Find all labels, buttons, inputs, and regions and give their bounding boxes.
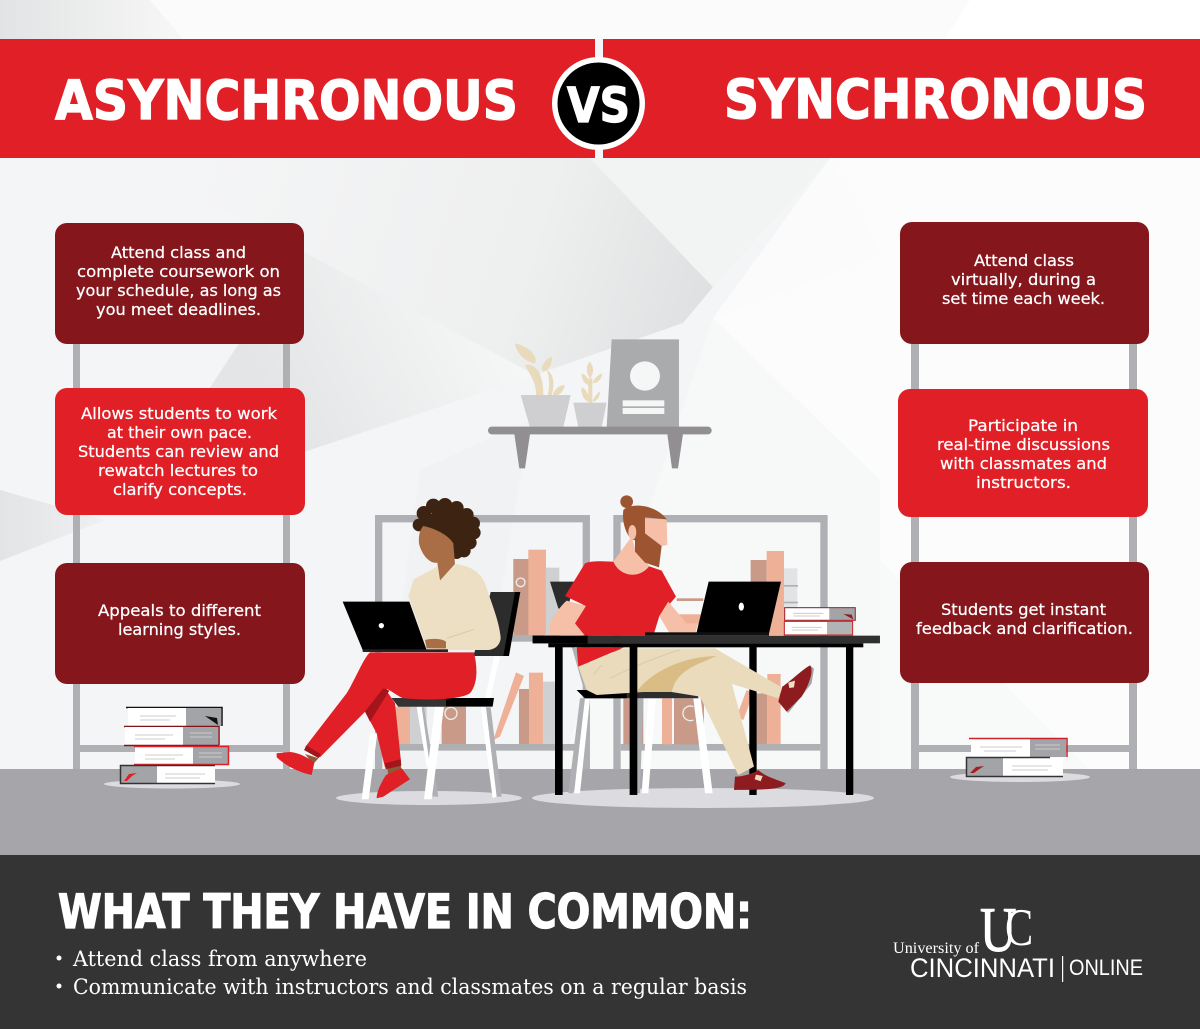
title: synchronous: SYNCHRONOUS bbox=[724, 68, 1147, 131]
card: real-time discussions: Participate in bbox=[968, 416, 1078, 435]
card: instant feedback: Students get instant bbox=[941, 600, 1106, 619]
card: attend on your schedule bbox=[55, 223, 304, 344]
book 2 bbox=[124, 727, 219, 746]
shirt bbox=[565, 561, 676, 636]
card: work at own pace: Allows students to work bbox=[81, 404, 278, 423]
chair bbox=[362, 592, 520, 799]
logo: University of Cincinnati Online: ONLINE bbox=[1069, 955, 1143, 980]
vs badge: VS bbox=[567, 78, 630, 134]
card: work at own pace: Students can review and bbox=[78, 442, 279, 461]
background facets bbox=[0, 0, 1200, 770]
far leg bbox=[672, 677, 754, 775]
shoe left bbox=[277, 752, 314, 775]
card: real-time discussions: instructors. bbox=[976, 473, 1071, 492]
sleeve crease bbox=[447, 629, 474, 638]
card: attend at set time: Attend class bbox=[974, 251, 1074, 270]
pants shadow bbox=[637, 656, 717, 692]
card: work at own pace: at their own pace. bbox=[107, 423, 252, 442]
title: asynchronous: ASYNCHRONOUS bbox=[55, 69, 518, 132]
card: instant feedback bbox=[900, 562, 1149, 683]
book 3 bbox=[134, 746, 228, 765]
monogram bbox=[980, 896, 1033, 965]
far leg bbox=[365, 688, 401, 767]
books on desk bbox=[784, 608, 855, 635]
laptop bbox=[645, 582, 781, 636]
back table leg bbox=[749, 647, 757, 795]
logo: University of Cincinnati Online: University of bbox=[893, 940, 980, 957]
book stack right bbox=[950, 738, 1090, 782]
face and neck bbox=[419, 526, 455, 581]
beard bbox=[635, 533, 662, 567]
pants creases bbox=[593, 650, 680, 678]
right bookcase bbox=[613, 515, 828, 769]
left shelving frame bbox=[73, 344, 290, 770]
left bookcase bbox=[375, 515, 590, 769]
curly hair bbox=[413, 498, 481, 559]
card: work at own pace bbox=[55, 388, 305, 515]
chair bbox=[550, 582, 713, 793]
hair and bun bbox=[620, 495, 667, 541]
card: learning styles: learning styles. bbox=[118, 620, 241, 639]
left floor shadow bbox=[336, 791, 522, 805]
woman at laptop on chair bbox=[277, 498, 520, 799]
monogram: U bbox=[980, 896, 1016, 965]
book 1 bbox=[124, 708, 222, 745]
panel: asynchronous points bbox=[55, 223, 305, 684]
card: instant feedback: feedback and clarification. bbox=[916, 619, 1133, 638]
footer list bbox=[56, 947, 747, 999]
wall shelf with plants and book bbox=[488, 339, 712, 468]
card: real-time discussions: real-time discussions bbox=[937, 435, 1110, 454]
card: attend at set time: virtually, during a bbox=[951, 270, 1096, 289]
right shelving frame bbox=[911, 344, 1137, 770]
shoe floor patch bbox=[755, 775, 763, 781]
right floor shadow bbox=[532, 788, 874, 808]
near leg and hips bbox=[578, 648, 782, 698]
ankle left bbox=[305, 754, 318, 764]
shoe raised sole bbox=[785, 665, 814, 713]
logo: University of Cincinnati Online: CINCINNATI bbox=[910, 953, 1055, 983]
face bbox=[645, 518, 667, 546]
laptop bbox=[343, 602, 448, 652]
knee shadow bbox=[365, 688, 389, 722]
cuff bbox=[385, 759, 401, 769]
card: attend on your schedule: your schedule, as long as bbox=[76, 281, 281, 300]
neck bbox=[613, 537, 649, 575]
card: attend at set time: set time each week. bbox=[942, 289, 1105, 308]
card: attend on your schedule: complete coursework on bbox=[77, 262, 280, 281]
footer heading: WHAT THEY HAVE IN COMMON: bbox=[58, 885, 752, 940]
cuff bbox=[304, 746, 321, 758]
card: attend on your schedule: you meet deadlines. bbox=[96, 300, 261, 319]
floor bbox=[0, 769, 1200, 856]
vs badge bbox=[552, 57, 645, 150]
card: learning styles bbox=[55, 563, 305, 684]
back arm bbox=[550, 601, 605, 635]
card: real-time discussions: with classmates and bbox=[940, 454, 1107, 473]
shoe right bbox=[377, 768, 410, 798]
card: attend at set time bbox=[900, 222, 1149, 344]
shoe raised patch bbox=[788, 681, 795, 688]
table bbox=[533, 636, 880, 795]
book 1 bbox=[969, 738, 1067, 757]
header banner bbox=[0, 39, 1200, 158]
card: work at own pace: rewatch lectures to bbox=[98, 461, 258, 480]
monogram: C bbox=[1005, 899, 1033, 957]
hand bbox=[425, 639, 446, 648]
book 2 bbox=[966, 758, 1063, 777]
card: work at own pace: clarify concepts. bbox=[113, 480, 247, 499]
card: learning styles: Appeals to different bbox=[98, 601, 261, 620]
card: real-time discussions bbox=[898, 389, 1148, 517]
front arm bbox=[659, 602, 698, 634]
card: attend on your schedule: Attend class and bbox=[111, 243, 246, 262]
footer band bbox=[0, 855, 1200, 1029]
book stack left bbox=[104, 708, 240, 788]
shoe floor bbox=[734, 770, 786, 790]
shoe raised bbox=[778, 665, 812, 712]
man at desk bbox=[533, 495, 880, 795]
book 4 bbox=[120, 766, 215, 784]
ear bbox=[628, 525, 636, 540]
ankle right bbox=[387, 765, 402, 777]
footer list: Attend class from anywhere bbox=[72, 947, 367, 971]
near leg and hips bbox=[305, 652, 476, 757]
footer list: Communicate with instructors and classmates on a regular basis bbox=[73, 975, 747, 999]
sweater bbox=[408, 564, 501, 650]
logo: University of Cincinnati Online bbox=[893, 896, 1143, 983]
panel: synchronous points bbox=[898, 222, 1149, 683]
